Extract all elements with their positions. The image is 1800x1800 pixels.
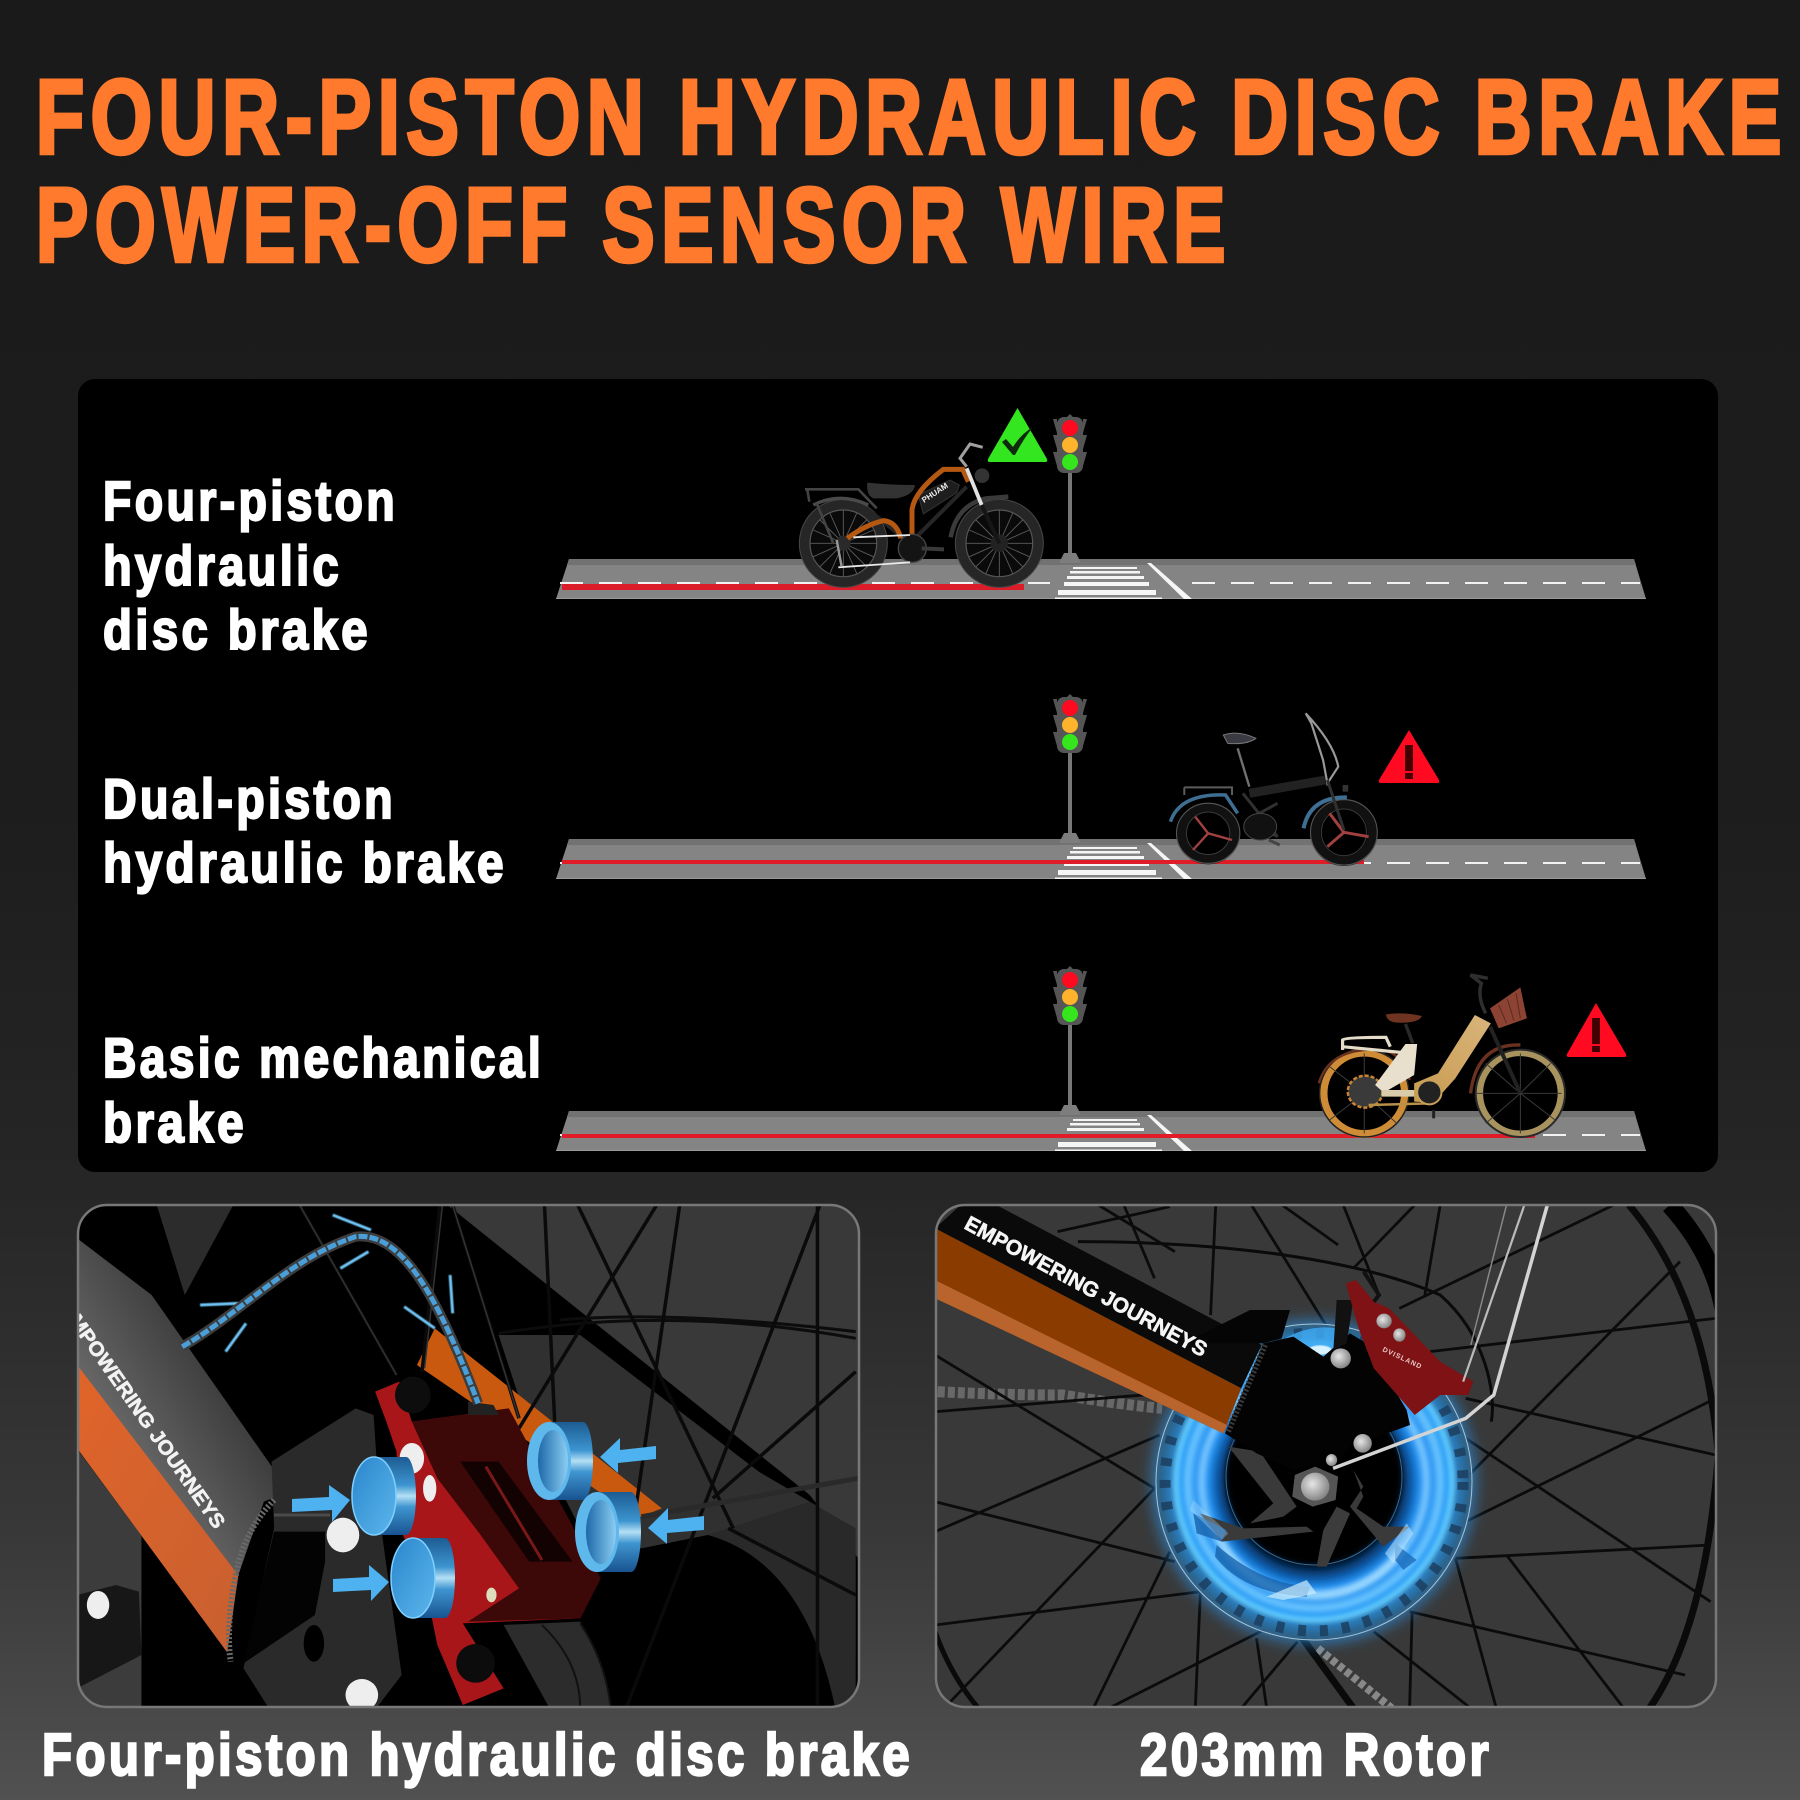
- panel border right: [936, 1205, 1716, 1707]
- row label: four-piston hydraulic disc brake: disc brake: [103, 598, 371, 661]
- row label: four-piston hydraulic disc brake: Four-piston: [103, 469, 398, 532]
- traffic light row 1: [1053, 414, 1087, 563]
- piston 3: [527, 1422, 593, 1500]
- row label: basic mechanical brake: Basic mechanical: [103, 1026, 544, 1089]
- chain: [938, 1392, 1162, 1408]
- title: [36, 59, 1788, 284]
- row label: dual-piston hydraulic brake: [103, 767, 507, 894]
- chainstay tube: [935, 1205, 1262, 1388]
- piston 1: [352, 1457, 416, 1535]
- road row 1: [556, 559, 1646, 599]
- rotor spider and highlights: [1190, 1447, 1417, 1600]
- seat: [867, 483, 915, 498]
- white bolts: [327, 1518, 359, 1552]
- rack stay: [1333, 1205, 1547, 1468]
- rim: [1629, 1205, 1718, 1708]
- row label: basic mechanical brake: [103, 1026, 544, 1154]
- title: POWER-OFF SENSOR WIRE: [36, 167, 1232, 284]
- front wheel: [961, 505, 1038, 582]
- caliper logo: DVISLAND: [1381, 1346, 1422, 1371]
- spokes: [935, 1205, 1716, 1708]
- drivetrain: [898, 534, 926, 562]
- row label: dual-piston hydraulic brake: Dual-piston: [103, 767, 396, 830]
- chainstay lettering: EMPOWERING JOURNEYS: [961, 1212, 1211, 1362]
- row label: four-piston hydraulic disc brake: [103, 469, 398, 661]
- icon: red warning triangle row 2: [1379, 730, 1439, 783]
- brake mount: [243, 1408, 402, 1708]
- sensor cable: [182, 1236, 478, 1403]
- icon: green check triangle: [988, 408, 1047, 462]
- row label: four-piston hydraulic disc brake: hydraulic: [103, 534, 342, 597]
- bike brand text: PHUAM: [920, 481, 950, 505]
- road row 3: [556, 1111, 1646, 1151]
- piston 4: [575, 1492, 641, 1572]
- traffic light row 2: [1053, 694, 1087, 843]
- frame tube: [77, 1238, 289, 1575]
- caption: four-piston hydraulic disc brake: Four-piston hydraulic disc brake: [42, 1722, 913, 1788]
- arrow 4: [648, 1508, 704, 1544]
- bike: folding e-bike row 2: [1170, 713, 1377, 865]
- row label: dual-piston hydraulic brake: hydraulic brake: [103, 831, 507, 894]
- sparks around cable: [200, 1215, 453, 1352]
- spokes and rim: [499, 1317, 856, 1338]
- caption: 203mm rotor: 203mm Rotor: [1140, 1722, 1492, 1788]
- bike: fat-tire e-bike row 1: [799, 444, 1043, 587]
- frame lettering: EMPOWERING JOURNEYS: [56, 1299, 229, 1533]
- traffic light row 3: [1053, 966, 1087, 1115]
- rear wheel: [805, 505, 882, 582]
- arrow 2: [333, 1565, 389, 1601]
- rotor glow ring: [1156, 1324, 1472, 1640]
- row label: basic mechanical brake: brake: [103, 1091, 247, 1154]
- caliper: [375, 1382, 601, 1705]
- photo panel: four-piston caliper: [56, 1205, 861, 1711]
- icon: red warning triangle row 3: [1567, 1003, 1626, 1057]
- dark background shapes: [70, 1205, 861, 1708]
- panel: braking distance comparison: [78, 379, 1718, 1172]
- caliper: [1346, 1280, 1473, 1415]
- panel border left: [78, 1205, 859, 1707]
- photo panel: 203mm rotor: [935, 1205, 1726, 1708]
- arrow 1: [292, 1485, 350, 1522]
- brake bracket: [1222, 1300, 1410, 1456]
- bike: step-through city bike row 3: [1319, 975, 1565, 1137]
- orange frame behind caliper: [417, 1328, 662, 1518]
- axle nut: [1292, 1467, 1338, 1507]
- road row 2: [556, 839, 1646, 879]
- arrow 3: [600, 1438, 656, 1473]
- fenders and rack: [813, 498, 868, 505]
- fork and handlebar: [967, 468, 982, 505]
- piston 2: [391, 1538, 455, 1618]
- frame: [867, 487, 967, 543]
